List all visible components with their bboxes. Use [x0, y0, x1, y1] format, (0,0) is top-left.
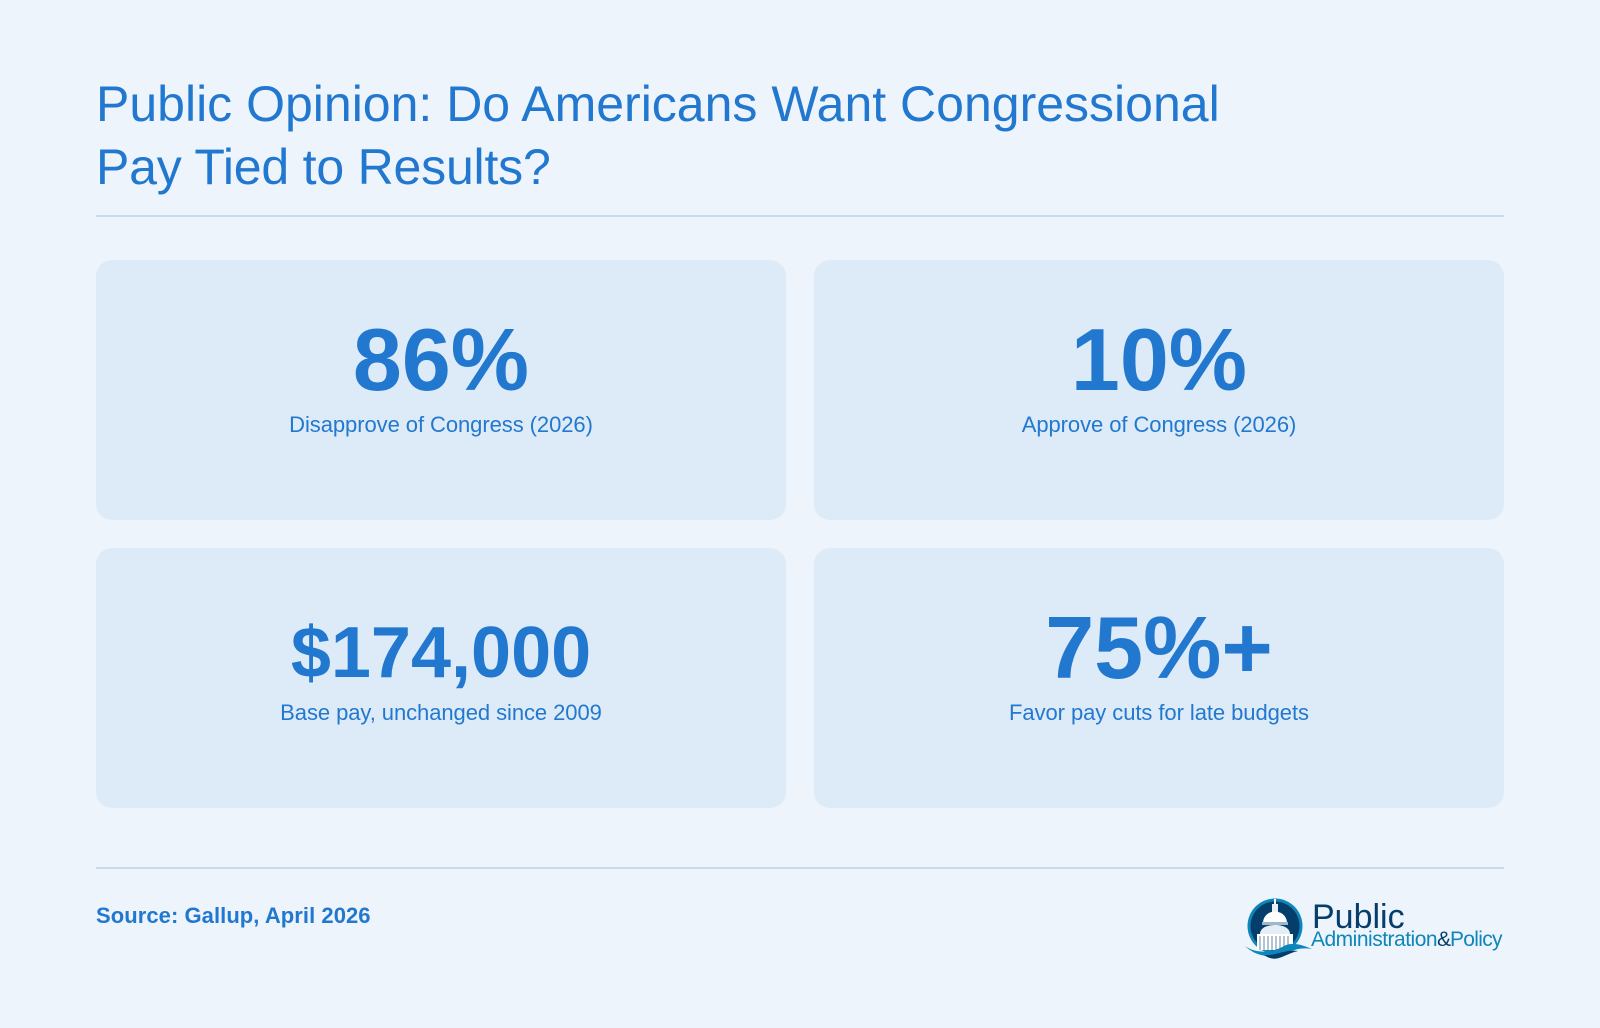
- title: Pay Tied to Results?: [96, 139, 551, 195]
- stat: 75%+: 75%+: [1045, 598, 1273, 697]
- panel: 86% disapprove: [96, 260, 786, 520]
- label: approve: Approve of Congress (2026): [1022, 412, 1296, 437]
- logo words: Administration & Policy: Policy: [1450, 928, 1503, 951]
- panel: base pay: [96, 548, 786, 808]
- title: Public Opinion: Do Americans Want Congressional: [96, 76, 1220, 132]
- title: [96, 76, 1220, 195]
- stat: $174,000: $174,000: [291, 613, 591, 693]
- icon: capitol dome: [1245, 898, 1312, 959]
- logo words: Administration & Policy: &: [1437, 928, 1451, 951]
- logo words: Administration & Policy: Administration: [1311, 928, 1437, 951]
- label: favor pay cuts: Favor pay cuts for late budgets: [1009, 700, 1309, 725]
- stat: 86%: 86%: [353, 310, 529, 409]
- panel: 10% approve: [814, 260, 1504, 520]
- label: base pay: Base pay, unchanged since 2009: [280, 700, 602, 725]
- source: Source: Gallup, April 2026: [96, 903, 371, 928]
- stat: 10%: 10%: [1071, 310, 1247, 409]
- label: disapprove: Disapprove of Congress (2026): [289, 412, 593, 437]
- logo word: Public: Public: [1312, 898, 1405, 936]
- logo: Public Administration & Policy: [1245, 898, 1503, 959]
- panel: favor pay cuts: [814, 548, 1504, 808]
